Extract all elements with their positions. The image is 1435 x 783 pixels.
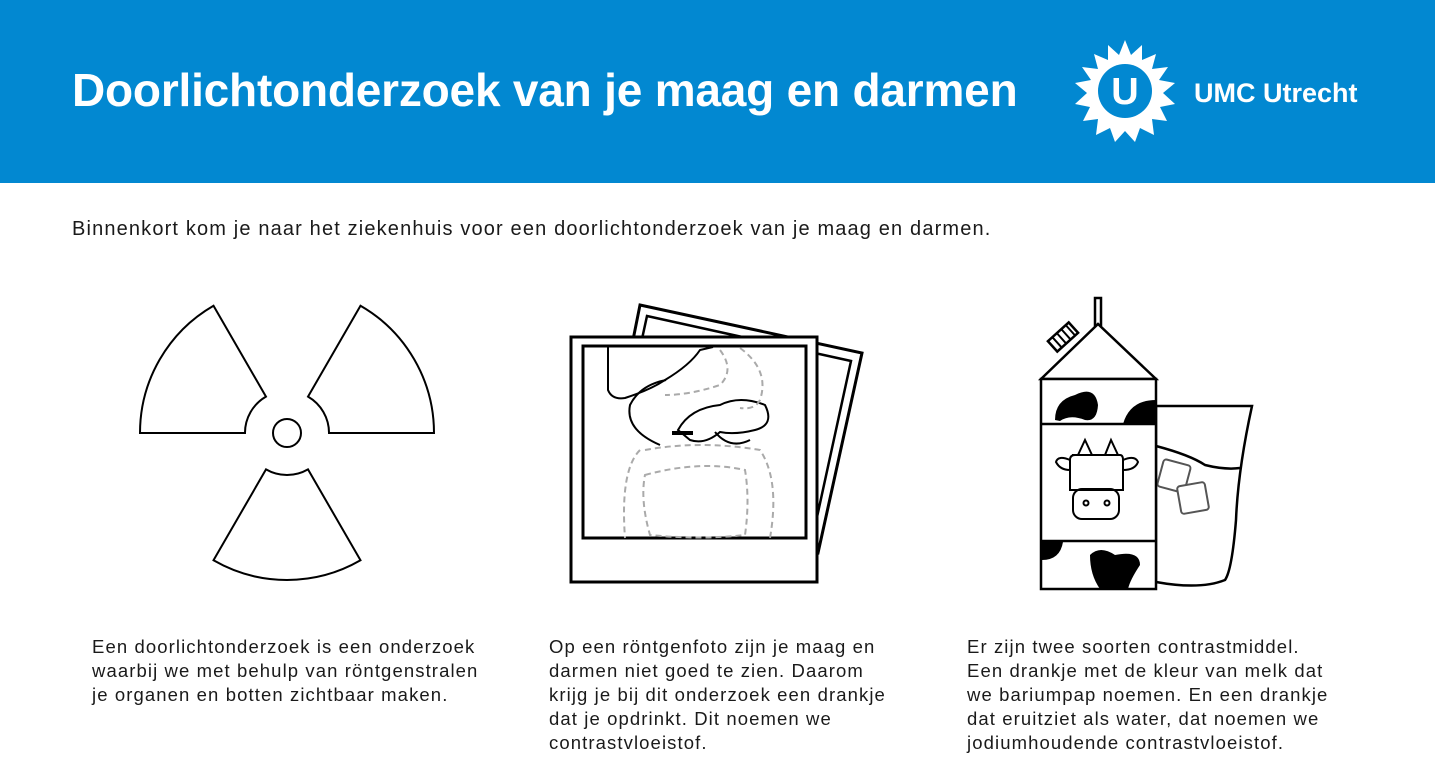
caption 3: Er zijn twee soorten contrastmiddel.	[967, 636, 1300, 657]
caption 1: Een doorlichtonderzoek is een onderzoek	[92, 636, 475, 657]
intro text: Binnenkort kom je naar het ziekenhuis voor een doorlichtonderzoek van je maag en darmen.	[72, 218, 991, 240]
caption 1: je organen en botten zichtbaar maken.	[92, 684, 448, 705]
caption 2: contrastvloeistof.	[549, 732, 708, 753]
title: Doorlichtonderzoek van je maag en darmen	[72, 64, 1017, 116]
logo: UMC Utrecht: U	[1111, 71, 1139, 113]
logo: UMC Utrecht	[1075, 40, 1358, 142]
logo: UMC Utrecht: UMC Utrecht	[1194, 78, 1358, 108]
caption 1: waarbij we met behulp van röntgenstralen	[92, 660, 478, 681]
caption 2: darmen niet goed te zien. Daarom	[549, 660, 864, 681]
caption 3: Een drankje met de kleur van melk dat	[967, 660, 1323, 681]
caption 3: dat eruitziet als water, dat noemen we	[967, 708, 1319, 729]
header banner	[0, 0, 1435, 183]
caption 3: we bariumpap noemen. En een drankje	[967, 684, 1328, 705]
caption 1	[92, 636, 478, 705]
caption 3: jodiumhoudende contrastvloeistof.	[967, 732, 1284, 753]
caption 2	[549, 636, 886, 753]
caption 2: krijg je bij dit onderzoek een drankje	[549, 684, 886, 705]
caption 3	[966, 636, 1328, 753]
caption 2: Op een röntgenfoto zijn je maag en	[549, 636, 875, 657]
caption 2: dat je opdrinkt. Dit noemen we	[549, 708, 832, 729]
